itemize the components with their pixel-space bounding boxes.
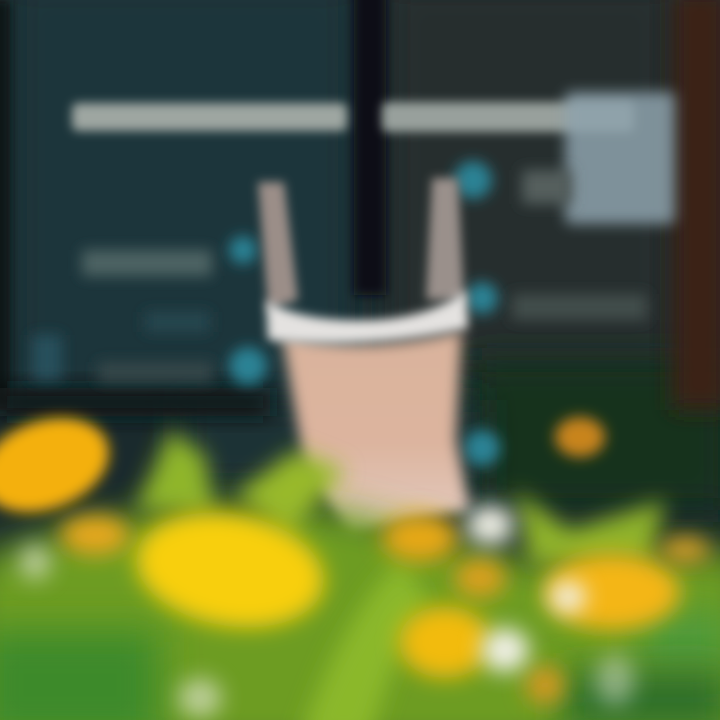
window frame: dark bars and brown post — [0, 0, 720, 416]
white neckline — [266, 290, 468, 343]
blurred heading bars — [72, 102, 634, 132]
dress body — [282, 330, 470, 535]
teal icon dots — [229, 161, 500, 466]
green foliage — [0, 430, 720, 720]
straps — [258, 182, 298, 310]
blurred text blocks — [32, 170, 647, 382]
dress on hanger — [258, 178, 470, 535]
white blossoms — [19, 505, 635, 718]
yellow flowers — [0, 401, 710, 705]
pale panel upper right — [565, 92, 675, 224]
